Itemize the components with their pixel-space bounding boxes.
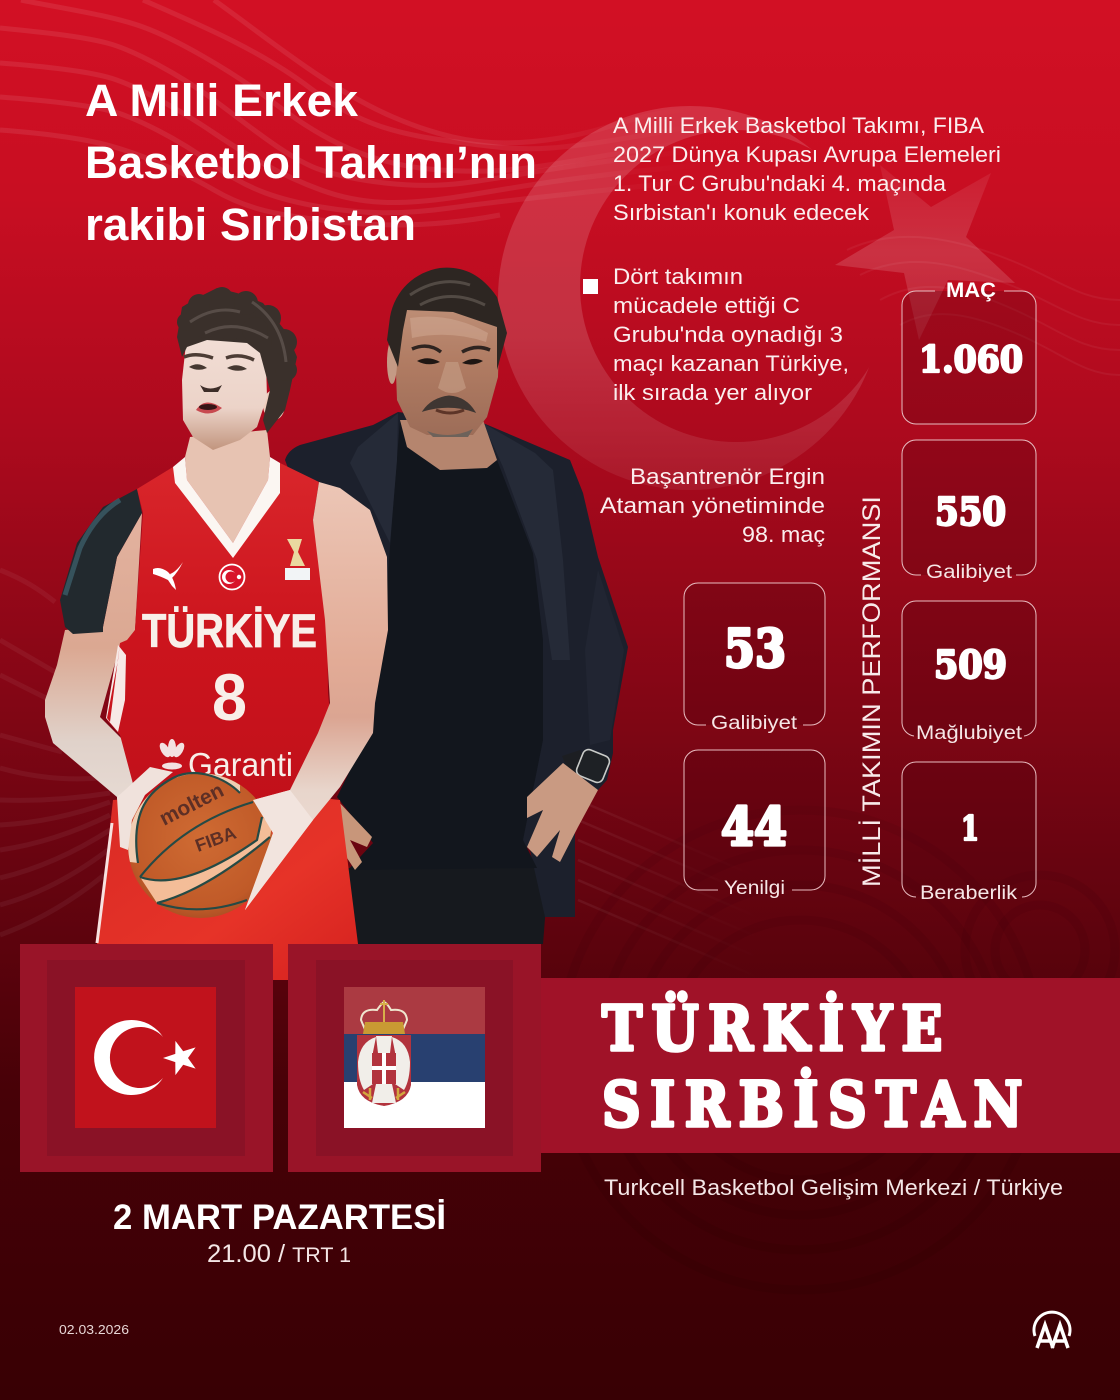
coach text: Ataman yönetiminde	[600, 493, 825, 518]
banner: match teams	[541, 978, 1120, 1153]
stat card: total matches	[902, 279, 1036, 424]
stat card: draws: Beraberlik	[920, 883, 1018, 904]
sponsor	[158, 739, 293, 783]
coach hand	[527, 763, 598, 862]
coach ear	[387, 340, 397, 384]
right hand	[245, 790, 313, 910]
match date and broadcast: 21.00 / TRT 1	[207, 1240, 351, 1268]
ear	[263, 390, 285, 420]
coach trousers	[348, 868, 547, 944]
ball seams	[136, 773, 270, 909]
coach brows and eyes	[412, 346, 490, 352]
stat card: coach losses 44: Yenilgi	[724, 878, 785, 899]
banner: match teams: TÜRKİYE	[602, 992, 952, 1065]
crown	[361, 1000, 407, 1034]
basketball: molten	[156, 779, 228, 830]
bullet text: group standing: Grubu'nda oynadığı 3	[613, 322, 843, 347]
flag panel: Sırbistan	[288, 944, 541, 1172]
bullet text: group standing: ilk sırada yer alıyor	[613, 380, 812, 405]
decorative Turkish crescent and star	[490, 100, 1015, 495]
stat card: wins: 550	[935, 489, 1006, 534]
tournament patch	[285, 539, 310, 580]
coach moustache	[423, 396, 475, 412]
vertical heading: MİLLİ TAKIMIN PERFORMANSI	[857, 496, 886, 887]
photo: player number 8	[45, 287, 388, 980]
stat card: coach wins 53	[684, 583, 825, 734]
flag panel: Türkiye	[20, 944, 273, 1172]
title: rakibi Sırbistan	[85, 199, 416, 250]
neck and chest	[185, 430, 270, 543]
coach text: Başantrenör Ergin	[630, 464, 825, 489]
bullet text: group standing: Dört takımın	[613, 264, 743, 289]
date stamp: 02.03.2026	[59, 1322, 129, 1337]
venue: Turkcell Basketbol Gelişim Merkezi / Türkiye	[604, 1175, 1063, 1200]
stat card: losses	[902, 601, 1036, 744]
coach goatee	[427, 429, 473, 437]
shorts	[97, 790, 358, 980]
jersey side stripe	[106, 645, 126, 732]
hair	[177, 287, 297, 433]
jersey collar	[173, 457, 280, 558]
Turkish flag	[75, 987, 216, 1128]
coat of arms	[357, 1035, 411, 1106]
basketball: FIBA	[193, 823, 239, 856]
player face	[182, 330, 267, 450]
basketball	[128, 773, 273, 918]
nose	[200, 385, 222, 392]
brows and eyes	[184, 355, 254, 360]
intro text: 2027 Dünya Kupası Avrupa Elemeleri	[613, 142, 1001, 167]
stat card: draws: 1	[961, 809, 979, 849]
coach sleeve highlight	[585, 570, 624, 745]
stat card: total matches: 1.060	[919, 339, 1023, 381]
coach text: 98. maç	[742, 522, 825, 547]
stat card: losses: 509	[934, 642, 1007, 687]
puma logo	[153, 562, 183, 590]
bullet text: group standing: mücadele ettiği C	[613, 293, 800, 318]
bullet text: group standing: maçı kazanan Türkiye,	[613, 351, 849, 376]
match date and broadcast	[113, 1198, 446, 1268]
icon: AA logo	[1034, 1312, 1070, 1348]
coach nose	[438, 362, 466, 393]
stat card: draws	[902, 762, 1036, 904]
jersey	[107, 463, 330, 815]
stat card: wins	[902, 440, 1036, 583]
stat card: wins: Galibiyet	[926, 562, 1013, 583]
coach jacket	[285, 412, 628, 917]
stat card: coach wins 53: 53	[724, 619, 786, 680]
match date and broadcast: 2 MART PAZARTESİ	[113, 1198, 446, 1237]
coach head	[395, 295, 500, 435]
title	[85, 75, 537, 250]
mouth	[196, 402, 222, 414]
left arm	[45, 513, 173, 850]
coach hair	[387, 268, 507, 370]
left hand	[117, 767, 173, 850]
photo: coach Ergin Ataman	[285, 268, 628, 944]
banner: match teams: SIRBİSTAN	[602, 1068, 1032, 1141]
stat card: losses: Mağlubiyet	[916, 723, 1023, 744]
Serbian flag	[344, 987, 485, 1128]
jersey name: TÜRKİYE	[142, 604, 317, 657]
intro text	[613, 113, 1001, 225]
intro text: Sırbistan'ı konuk edecek	[613, 200, 870, 225]
jersey crest	[220, 564, 244, 590]
coach lapels	[350, 413, 398, 543]
jersey number: 8	[212, 660, 247, 734]
right arm	[245, 482, 388, 910]
coach forehead highlight	[410, 317, 488, 342]
coach neck	[400, 420, 497, 470]
coach shirt	[337, 420, 543, 870]
title: Basketbol Takımı’nın	[85, 137, 537, 188]
coach text	[600, 464, 825, 547]
intro text: A Milli Erkek Basketbol Takımı, FIBA	[613, 113, 984, 138]
stat card: coach losses 44: 44	[721, 797, 787, 858]
stat card: total matches: MAÇ	[946, 279, 996, 302]
bullet text: group standing	[583, 264, 849, 405]
coach left fingers	[335, 800, 372, 870]
stat card: coach wins 53: Galibiyet	[711, 713, 798, 734]
title: A Milli Erkek	[85, 75, 359, 126]
sponsor: Garanti	[188, 746, 293, 783]
intro text: 1. Tur C Grubu'ndaki 4. maçında	[613, 171, 947, 196]
shoulder tape	[60, 489, 142, 634]
ball cream panels	[128, 773, 240, 863]
stat card: coach losses 44	[684, 750, 825, 899]
coach watch	[562, 748, 611, 784]
